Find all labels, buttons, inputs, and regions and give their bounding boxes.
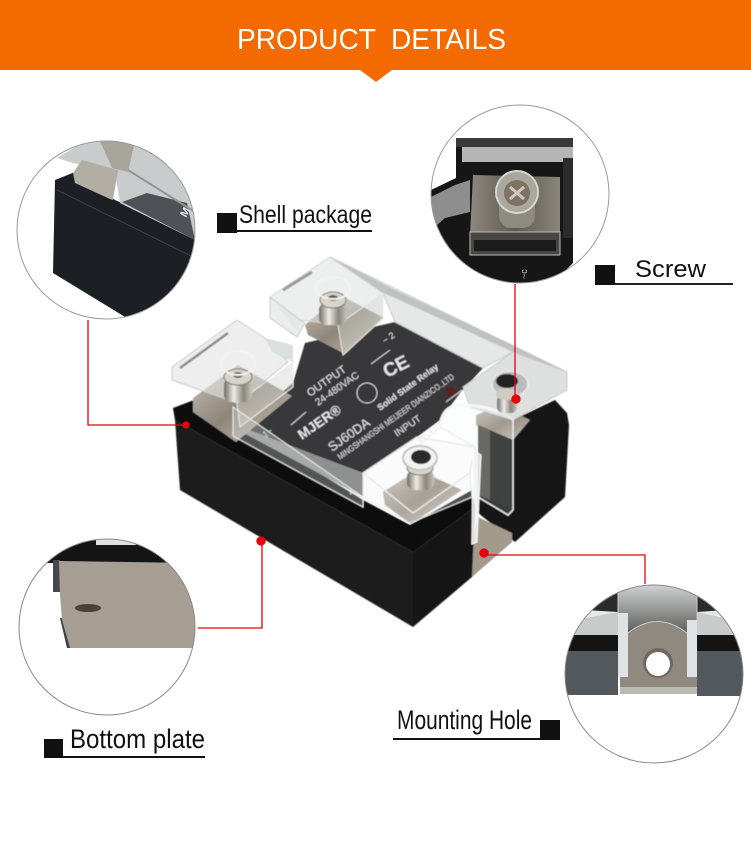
printed label text: CE (380, 352, 413, 382)
label: screw: Screw (635, 256, 707, 283)
clear cover bottom block (363, 437, 475, 513)
clear U arch (618, 585, 697, 633)
printed label text: MJER® (295, 401, 345, 442)
printed label text: 24-480VAC (313, 370, 361, 408)
printed label text: 1~ (260, 426, 275, 440)
rear black block (478, 400, 569, 542)
printed label text (260, 330, 462, 498)
terminal plate top (305, 295, 384, 354)
black top edge (47, 540, 166, 563)
label: shell package (217, 201, 372, 233)
header band (0, 0, 751, 82)
metal plate surface (59, 561, 195, 648)
black housing short face (413, 507, 475, 627)
inset circle: mounting hole (560, 585, 747, 763)
left block front wall (237, 362, 293, 427)
leader: screw (512, 284, 520, 403)
terminal plate bottom (383, 470, 462, 524)
inset circle: bottom plate (19, 539, 195, 715)
clear cover right block (463, 352, 567, 420)
housing close-up (53, 172, 195, 320)
screw left (221, 351, 255, 402)
left black block (568, 635, 618, 651)
clear cover left block (172, 320, 288, 403)
inset circle: screw (431, 105, 609, 283)
metal terminal close-up (73, 160, 118, 200)
relay product photo (172, 257, 569, 627)
clip bar (470, 232, 560, 255)
printed label text: INPUT (393, 414, 424, 439)
printed label text: 4 (346, 487, 356, 498)
right black block (697, 635, 740, 651)
screw close-up (499, 204, 535, 228)
printed label text: OUTPUT (305, 364, 349, 399)
printed label text: ~ 2 (380, 330, 397, 346)
header pointer (360, 70, 392, 82)
plate with hole (620, 622, 697, 687)
cover background (586, 610, 722, 618)
screw right (492, 371, 528, 413)
label: shell package: Shell package (239, 201, 372, 229)
leader: mounting hole (480, 549, 645, 584)
printed label text: Solid State Relay (375, 362, 440, 413)
metal plate (470, 175, 560, 235)
clear cover frame (456, 138, 573, 147)
label: screw (595, 256, 733, 285)
label: mounting hole: Mounting Hole (397, 705, 532, 735)
lip shading under cover (236, 425, 363, 497)
title: PRODUCT DETAILS (237, 24, 506, 56)
printed mark: M (178, 206, 193, 220)
leader: bottom plate (198, 537, 265, 628)
leader: shell package (88, 320, 189, 428)
mounting base plate (472, 517, 512, 577)
printed mark: ~c (519, 269, 529, 279)
black housing long face (175, 420, 413, 627)
printed label text: MINGSHANGSHI MEIJEER DIANZICO.,LTD (335, 372, 456, 462)
label: bottom plate: Bottom plate (70, 724, 205, 754)
clear leg interior (478, 425, 513, 510)
left dark strip (53, 560, 60, 592)
screw top (316, 277, 350, 325)
clear cover front tab (472, 450, 481, 544)
black housing top (173, 400, 475, 552)
dark label panel (240, 322, 483, 473)
clear cover top band (330, 257, 567, 372)
clear cover right wall (440, 405, 513, 515)
printed label text: 32VDC (415, 421, 444, 447)
dark backdrop (431, 138, 573, 283)
clear cover close-up (57, 141, 195, 240)
screw bottom (403, 446, 437, 490)
label: bottom plate (44, 724, 205, 758)
clear cover top block (270, 257, 383, 325)
terminal plate left (193, 365, 292, 442)
clear cover front lip (233, 407, 363, 507)
printed label text: SJ60DA (325, 415, 373, 454)
plate hole (75, 604, 101, 612)
terminal plate right (476, 405, 530, 440)
inset circle: shell package (17, 141, 195, 320)
